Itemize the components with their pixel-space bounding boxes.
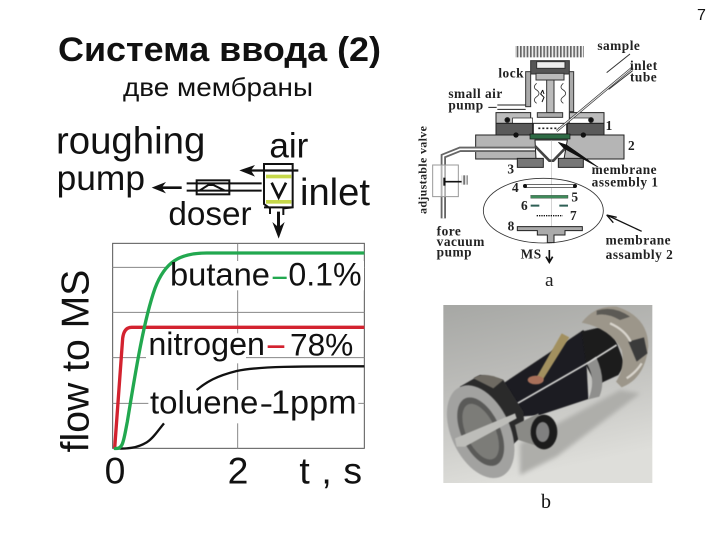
subtitle: две мембраны — [123, 72, 313, 102]
text: MS: MS — [521, 246, 542, 261]
label: air: air — [269, 126, 309, 165]
label: butane: 0.1% — [288, 257, 362, 293]
schematic: air inlet and doser — [56, 119, 370, 239]
gas line — [443, 149, 535, 218]
flange ring — [448, 390, 514, 473]
valve body — [264, 164, 293, 215]
pointer arrow to membrane 1 — [558, 142, 598, 167]
curve: nitrogen — [115, 327, 364, 448]
label: nitrogen: 78% — [290, 327, 353, 363]
page number: 7 — [697, 7, 706, 24]
center axis — [550, 140, 552, 243]
part numbers: 4 — [512, 180, 519, 195]
part numbers: 2 — [628, 138, 635, 153]
label: inlet: inlet — [300, 172, 370, 214]
label: doser: doser — [168, 196, 252, 233]
side port inner — [536, 422, 549, 442]
membrane assembly 2 ellipse — [483, 178, 603, 243]
upper housing — [526, 61, 574, 117]
lower block 3 — [517, 158, 583, 167]
copper tip — [528, 376, 544, 384]
photo background — [443, 305, 652, 483]
inlet tube bore — [557, 67, 633, 131]
label mask: nitrogen — [146, 333, 246, 363]
label: toluene: 1ppm — [271, 384, 357, 421]
flange face — [433, 375, 528, 489]
label: butane — [170, 256, 362, 293]
text: lock: lock — [498, 66, 524, 81]
caption b: b — [541, 491, 551, 513]
label: butane: butane — [170, 256, 270, 293]
y axis label: flow to MS — [54, 270, 97, 452]
inlet tube — [557, 67, 633, 131]
valve knob — [443, 175, 468, 186]
text: small air pump: small air — [448, 86, 503, 101]
part 7 — [537, 214, 563, 218]
top lug — [473, 375, 503, 388]
collar — [587, 357, 602, 399]
main cylinder — [503, 330, 597, 417]
end bell flange — [582, 307, 648, 387]
x tick 0: 0 — [105, 449, 125, 491]
brass tube — [535, 333, 569, 382]
funnel — [535, 146, 567, 161]
top plate 1 — [496, 113, 604, 135]
label: toluene: toluene — [150, 384, 258, 420]
knob — [515, 46, 584, 57]
arrow: air in — [239, 165, 298, 177]
label: roughing: roughing — [56, 119, 205, 162]
small air pump line — [488, 105, 526, 109]
photo b: membrane inlet device — [433, 305, 652, 489]
text: inlet tube: inlet — [630, 58, 658, 73]
text: membrane assembly 2: assambly 2 — [606, 247, 673, 262]
text: membrane assembly 2: membrane — [606, 233, 671, 248]
adjustable valve box — [433, 165, 458, 197]
label: toluene — [150, 384, 357, 421]
text: membrane assembly 1: assembly 1 — [592, 175, 659, 190]
text: fore vacuum pump: pump — [437, 245, 472, 260]
chart: flow to MS vs time — [54, 243, 364, 491]
label: nitrogen — [148, 326, 353, 363]
membrane assembly 1 green disc — [530, 134, 570, 139]
sample arrows — [607, 54, 633, 89]
soft shadow — [520, 390, 640, 475]
left hub — [460, 375, 525, 453]
text: small air pump: pump — [448, 97, 484, 112]
o-rings — [513, 132, 586, 138]
side pin — [455, 413, 517, 447]
bright rim — [610, 323, 642, 378]
part numbers: 7 — [570, 208, 577, 223]
main block 2 — [476, 135, 624, 159]
text: fore vacuum pump: vacuum — [437, 234, 485, 249]
chart grid — [113, 243, 364, 448]
text: membrane assembly 1: membrane — [592, 162, 657, 177]
x tick 2: 2 — [228, 449, 248, 491]
text: fore vacuum pump: fore — [437, 224, 461, 239]
part numbers: 8 — [508, 218, 515, 233]
caption a: a — [545, 270, 554, 291]
rear cylinder — [582, 325, 625, 385]
part numbers — [507, 118, 635, 233]
arrow: to MS — [272, 212, 285, 239]
part numbers: 5 — [571, 190, 579, 205]
bell top shading — [597, 309, 630, 320]
part 4 — [523, 184, 577, 188]
label: nitrogen: nitrogen — [148, 326, 265, 362]
part 8 — [517, 227, 582, 243]
arrow to MS — [546, 250, 553, 262]
x axis label: t , s — [299, 449, 362, 491]
part numbers: 1 — [606, 118, 613, 133]
text: adjustable valve: adjustable valve — [415, 125, 429, 214]
doser element — [187, 180, 262, 194]
dark inner flange — [628, 337, 647, 362]
flange inner — [455, 398, 507, 465]
pointer arrow to ellipse — [607, 215, 642, 231]
part 6 — [531, 203, 568, 209]
part numbers: 6 — [521, 198, 528, 213]
curve: butane — [114, 253, 364, 449]
text: sample: sample — [597, 38, 640, 53]
label: pump: pump — [57, 159, 145, 198]
title: Система ввода (2) — [58, 31, 381, 69]
arrow: to pump — [152, 182, 182, 193]
diagram a: membrane inlet cross-section — [415, 38, 673, 291]
device body — [433, 307, 648, 489]
curve: toluene — [115, 366, 364, 449]
label mask: toluene — [148, 390, 358, 423]
label mask: butane — [168, 261, 364, 290]
highlight on cylinder — [512, 345, 617, 407]
side port — [531, 415, 557, 449]
part numbers: 3 — [507, 161, 515, 176]
gas line bore — [443, 149, 535, 218]
side port neck — [515, 413, 545, 448]
part 5 — [531, 195, 568, 198]
text: inlet tube: tube — [630, 70, 657, 85]
